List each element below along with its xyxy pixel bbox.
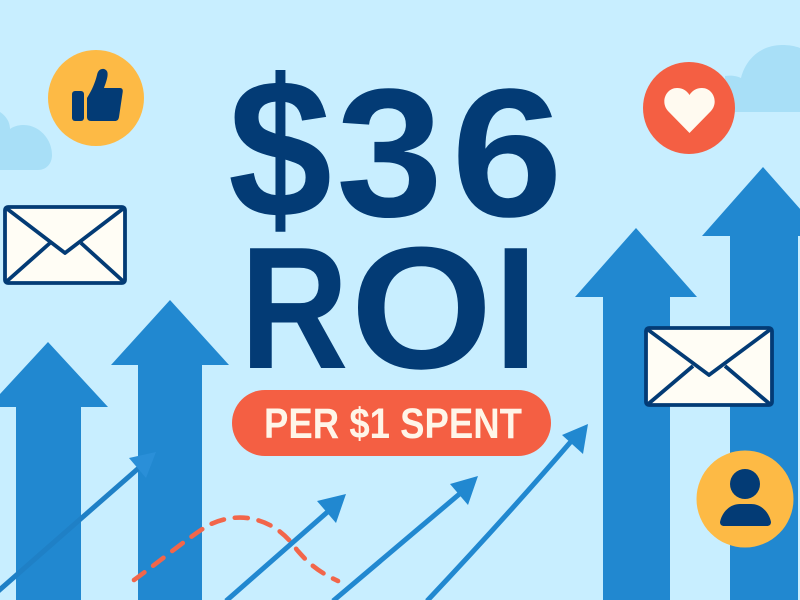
headline: ROI: R [240, 210, 349, 405]
thin trend arrow 1 [0, 452, 156, 593]
large arrow 4 [702, 167, 800, 600]
cloud: left [0, 112, 52, 170]
icon: envelope left [5, 207, 125, 283]
thin trend arrow 4 [427, 424, 588, 600]
headline: $36: 6 [451, 50, 563, 255]
icon: person badge [696, 450, 794, 548]
headline: ROI: I [494, 210, 537, 405]
callout pill: per $1 spent: PER $1 SPENT [264, 400, 522, 448]
large arrow 2 [111, 300, 229, 600]
headline: ROI: O [350, 210, 492, 405]
dashed coral trend line [134, 518, 338, 581]
headline: $36 [228, 38, 563, 259]
thin trend arrow 3 [333, 476, 478, 600]
thin trend arrow 2 [226, 494, 346, 600]
icon: thumbs up badge [48, 50, 144, 146]
large arrow 1 [0, 342, 108, 600]
headline: $36: $ [228, 38, 332, 259]
large arrow 3 [575, 228, 697, 600]
icon: heart badge [643, 62, 735, 154]
cloud: right [725, 45, 800, 112]
callout pill: per $1 spent [232, 390, 551, 456]
icon: envelope right [646, 328, 772, 405]
headline: $36: 3 [336, 50, 443, 255]
